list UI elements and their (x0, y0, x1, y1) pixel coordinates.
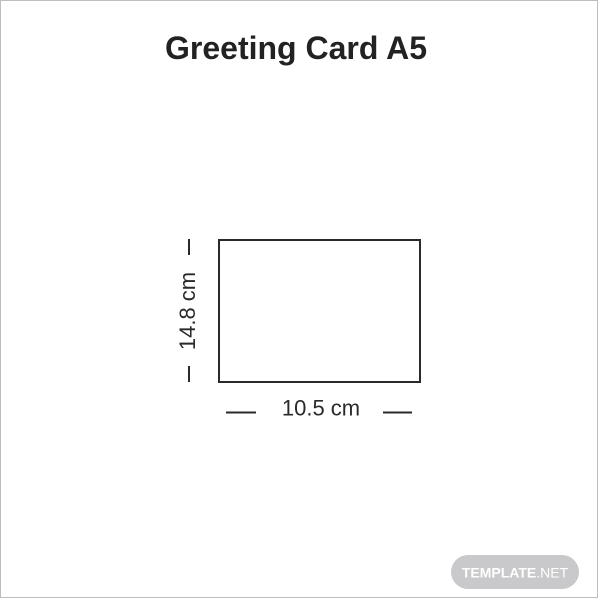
height dimension: 14.8 cm (175, 272, 200, 350)
badge: template.net: TEMPLATE.NET (462, 564, 569, 580)
badge: template.net (451, 555, 579, 589)
title: Greeting Card A5 (165, 30, 427, 66)
width dimension: 10.5 cm (282, 396, 360, 420)
card rectangle (219, 240, 420, 382)
